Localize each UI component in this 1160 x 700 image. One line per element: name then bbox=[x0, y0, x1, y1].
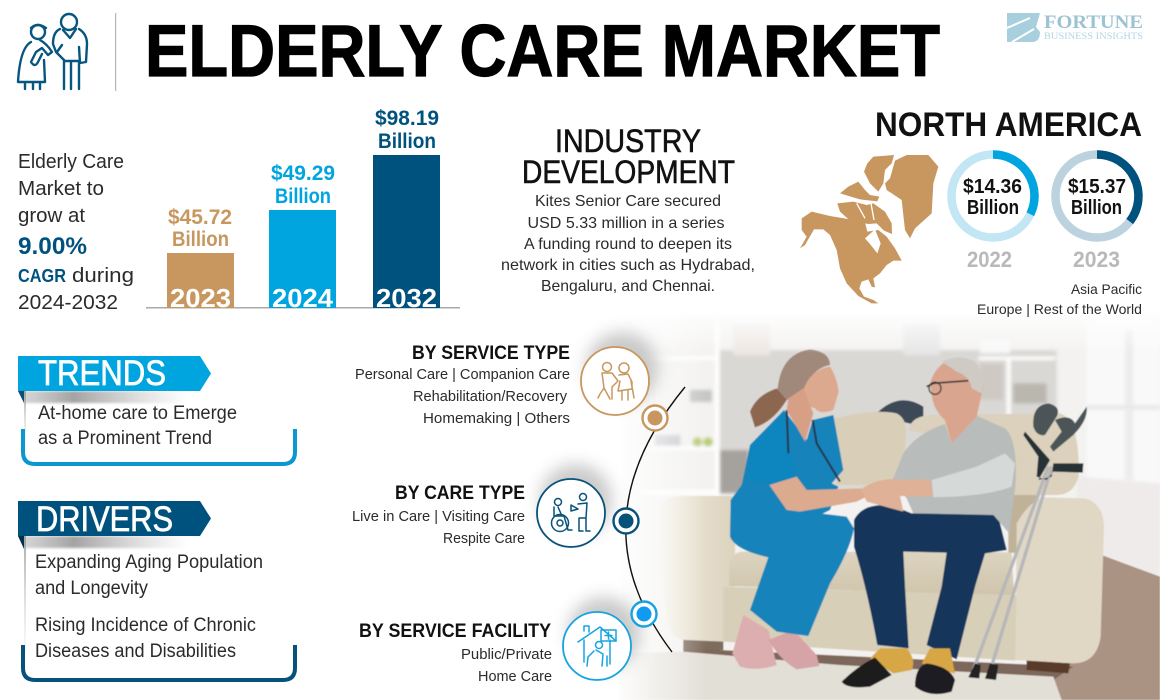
glasses bbox=[927, 381, 968, 387]
text: CAGR statement bbox=[18, 151, 134, 314]
icon: elderly couple bbox=[18, 14, 87, 89]
panel: drivers: Rising Incidence of Chronic bbox=[35, 615, 256, 636]
slippers bbox=[870, 648, 913, 673]
panel: drivers: Expanding Aging Population bbox=[35, 552, 263, 573]
text: CAGR statement: Elderly Care bbox=[18, 151, 124, 173]
timeline arc bbox=[626, 387, 685, 652]
text: industry development: Bengaluru, and Chennai. bbox=[541, 278, 715, 295]
panel: trends: as a Prominent Trend bbox=[38, 428, 212, 449]
segment: by care type: Respite Care bbox=[443, 530, 525, 547]
text: CAGR statement: 2024-2032 bbox=[18, 292, 118, 314]
segment: by care type bbox=[352, 464, 638, 547]
rug bbox=[620, 652, 1062, 700]
segment: by service facility: Public/Private bbox=[461, 646, 552, 663]
text: CAGR statement: CAGR bbox=[18, 265, 66, 286]
text: industry development bbox=[501, 123, 755, 295]
bar: 2023: 2023 bbox=[170, 283, 231, 313]
logo: Fortune Business Insights: BUSINESS INSIGHTS bbox=[1044, 32, 1143, 42]
donut chart: 2022 bbox=[952, 154, 1035, 272]
sofa feet bbox=[683, 638, 723, 650]
donut chart: 2022: Billion bbox=[967, 197, 1019, 219]
nurse arm bbox=[769, 477, 870, 512]
text: other regions: Asia Pacific bbox=[1071, 281, 1142, 297]
bar chart: market size bbox=[146, 107, 460, 313]
panel: drivers: DRIVERS bbox=[36, 500, 173, 539]
panel: drivers: and Longevity bbox=[35, 578, 148, 599]
title: ELDERLY CARE MARKET bbox=[145, 11, 940, 92]
donut chart: 2023: 2023 bbox=[1073, 247, 1120, 272]
bar: 2032: Billion bbox=[378, 130, 436, 153]
panel: drivers bbox=[18, 500, 295, 680]
icon: wheelchair and carer bbox=[537, 479, 605, 547]
segment: by care type: BY CARE TYPE bbox=[395, 483, 525, 504]
segment: by service facility bbox=[359, 597, 656, 685]
segment: by service type: Personal Care | Companion Care bbox=[355, 366, 570, 383]
panel: trends bbox=[18, 354, 295, 464]
panel: drivers: Diseases and Disabilities bbox=[35, 641, 236, 662]
nurse face bbox=[803, 367, 839, 412]
panel: trends: At-home care to Emerge bbox=[38, 403, 237, 424]
segment: by service type: Homemaking | Others bbox=[423, 410, 570, 427]
nurse trousers bbox=[730, 487, 854, 636]
map: North America bbox=[800, 155, 938, 303]
donut chart: 2023 bbox=[1056, 154, 1138, 272]
logo: Fortune Business Insights: FORTUNE bbox=[1044, 12, 1143, 33]
donut chart: 2023: $15.37 bbox=[1068, 176, 1126, 198]
floor bbox=[1053, 555, 1160, 700]
text: other regions: Europe | Rest of the World bbox=[977, 301, 1142, 317]
sofa back cushions bbox=[830, 412, 906, 485]
text: CAGR statement: Market to bbox=[18, 178, 104, 200]
text: other regions bbox=[977, 281, 1142, 317]
man trousers bbox=[854, 503, 1007, 659]
bar: 2032: $98.19 bbox=[375, 107, 439, 130]
text: industry development: A funding round to deepen its bbox=[524, 236, 732, 253]
text: industry development: USD 5.33 million in a series bbox=[528, 215, 724, 232]
text: industry development: DEVELOPMENT bbox=[522, 154, 735, 190]
sofa seat bbox=[729, 552, 1014, 596]
photo fades bbox=[613, 310, 1160, 353]
stethoscope bbox=[787, 410, 840, 482]
donut chart: 2022: 2022 bbox=[967, 247, 1012, 272]
bar: 2024: 2024 bbox=[272, 283, 334, 313]
chair back bbox=[878, 400, 923, 427]
marker: service type bbox=[642, 406, 668, 430]
bar: 2023: $45.72 bbox=[168, 206, 232, 229]
photo: nurse and elderly man on sofa bbox=[613, 310, 1160, 700]
man sweater bbox=[893, 416, 1016, 533]
sofa right arm bbox=[1016, 497, 1104, 663]
bar: 2032 bbox=[373, 107, 440, 313]
segment: by care type: Live in Care | Visiting Care bbox=[352, 508, 525, 525]
nurse scrub top bbox=[731, 410, 843, 520]
sofa left arm bbox=[660, 496, 735, 642]
bar: 2023: Billion bbox=[172, 228, 229, 251]
crutches bbox=[973, 467, 1052, 672]
bar: 2024: Billion bbox=[275, 185, 331, 208]
text: CAGR statement: grow at bbox=[18, 205, 85, 227]
nurse pink shoes bbox=[732, 615, 777, 669]
donut chart: 2023: Billion bbox=[1071, 197, 1122, 219]
text: industry development: INDUSTRY bbox=[555, 123, 701, 159]
segment: by service facility: Home Care bbox=[478, 668, 552, 685]
text: industry development: Kites Senior Care secured bbox=[535, 193, 721, 210]
logo: Fortune Business Insights bbox=[1007, 12, 1143, 42]
marker: care type bbox=[614, 508, 638, 534]
text: CAGR statement: 9.00% bbox=[18, 233, 87, 260]
segment: by service type: BY SERVICE TYPE bbox=[412, 343, 570, 364]
heading: North America: NORTH AMERICA bbox=[875, 106, 1142, 144]
bar: 2023 bbox=[167, 206, 234, 313]
bar: 2024: $49.29 bbox=[271, 162, 335, 185]
donut chart: 2022: $14.36 bbox=[963, 176, 1022, 198]
panel: trends: TRENDS bbox=[38, 354, 166, 393]
icon: caregiver with senior bbox=[581, 347, 649, 415]
man hands bbox=[861, 479, 933, 512]
marker: service facility bbox=[632, 602, 656, 626]
segment: by service facility: BY SERVICE FACILITY bbox=[359, 621, 551, 642]
sofa front bbox=[723, 587, 1017, 661]
bar: 2024 bbox=[269, 162, 336, 313]
nurse hair bbox=[777, 349, 830, 400]
man head bbox=[930, 357, 983, 443]
text: industry development: network in cities such as Hydrabad, bbox=[501, 257, 755, 274]
text: CAGR statement: during bbox=[72, 265, 134, 287]
segment: by service type: Rehabilitation/Recovery bbox=[413, 388, 567, 405]
bar: 2032: 2032 bbox=[376, 283, 437, 313]
icon: home healthcare bbox=[563, 612, 631, 680]
segment: by service type bbox=[355, 332, 668, 430]
